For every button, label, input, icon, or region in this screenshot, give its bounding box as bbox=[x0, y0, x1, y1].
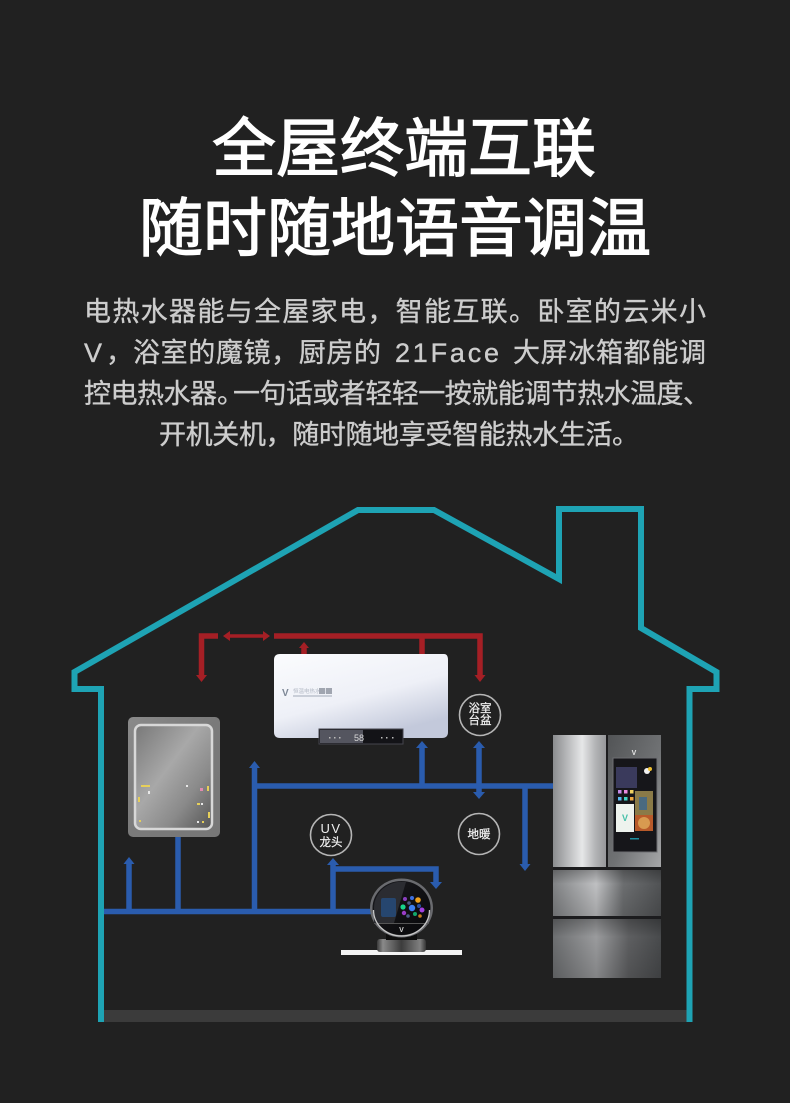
water heater bbox=[274, 654, 448, 744]
smart refrigerator bbox=[553, 735, 661, 978]
smart mirror bbox=[128, 717, 220, 837]
description text: 电热水器能与全屋家电，智能互联。卧室的云米小 bbox=[84, 297, 706, 327]
heater control panel: 58 bbox=[354, 733, 364, 743]
label: bathroom basin: 浴室 bbox=[468, 701, 492, 715]
water heater: V bbox=[282, 688, 289, 699]
floor bbox=[104, 1010, 687, 1022]
cold water pipes bbox=[104, 741, 554, 912]
label: bathroom basin bbox=[460, 694, 500, 736]
refrigerator touch screen bbox=[613, 758, 657, 852]
house outline bbox=[74, 509, 716, 1022]
title: 随时随地语音调温 bbox=[139, 193, 651, 265]
label: bathroom basin: 台盆 bbox=[468, 713, 492, 727]
description text: 一句话或者轻轻一按就能调节热水温度、 bbox=[233, 379, 710, 409]
water heater: 恒温电热水器 bbox=[293, 687, 327, 695]
description text: 。 bbox=[217, 379, 244, 409]
label: UV faucet: 龙头 bbox=[320, 836, 342, 849]
description text: 开机关机，随时随地享受智能热水生活。 bbox=[159, 420, 639, 450]
heater control panel bbox=[319, 729, 403, 744]
label: underfloor heating: 地暖 bbox=[468, 828, 491, 841]
smart speaker robot bbox=[341, 878, 462, 955]
title: 全屋终端互联 bbox=[212, 113, 596, 185]
description text bbox=[84, 297, 710, 450]
smart speaker robot: V bbox=[399, 927, 404, 934]
label: UV faucet bbox=[310, 814, 352, 856]
description text: 浴室的魔镜，厨房的 bbox=[133, 338, 381, 368]
label: underfloor heating bbox=[458, 814, 500, 854]
description text: 控电热水器 bbox=[84, 379, 217, 409]
hot water pipes bbox=[196, 631, 486, 682]
description text: 大屏冰箱都能调 bbox=[513, 338, 706, 368]
description text: ， bbox=[106, 338, 133, 368]
title bbox=[139, 113, 651, 265]
label: UV faucet: UV bbox=[320, 821, 342, 836]
description text: V bbox=[84, 338, 102, 368]
description text: 21Face bbox=[395, 338, 499, 368]
smart refrigerator: V bbox=[632, 750, 637, 757]
refrigerator touch screen: V bbox=[622, 813, 628, 823]
